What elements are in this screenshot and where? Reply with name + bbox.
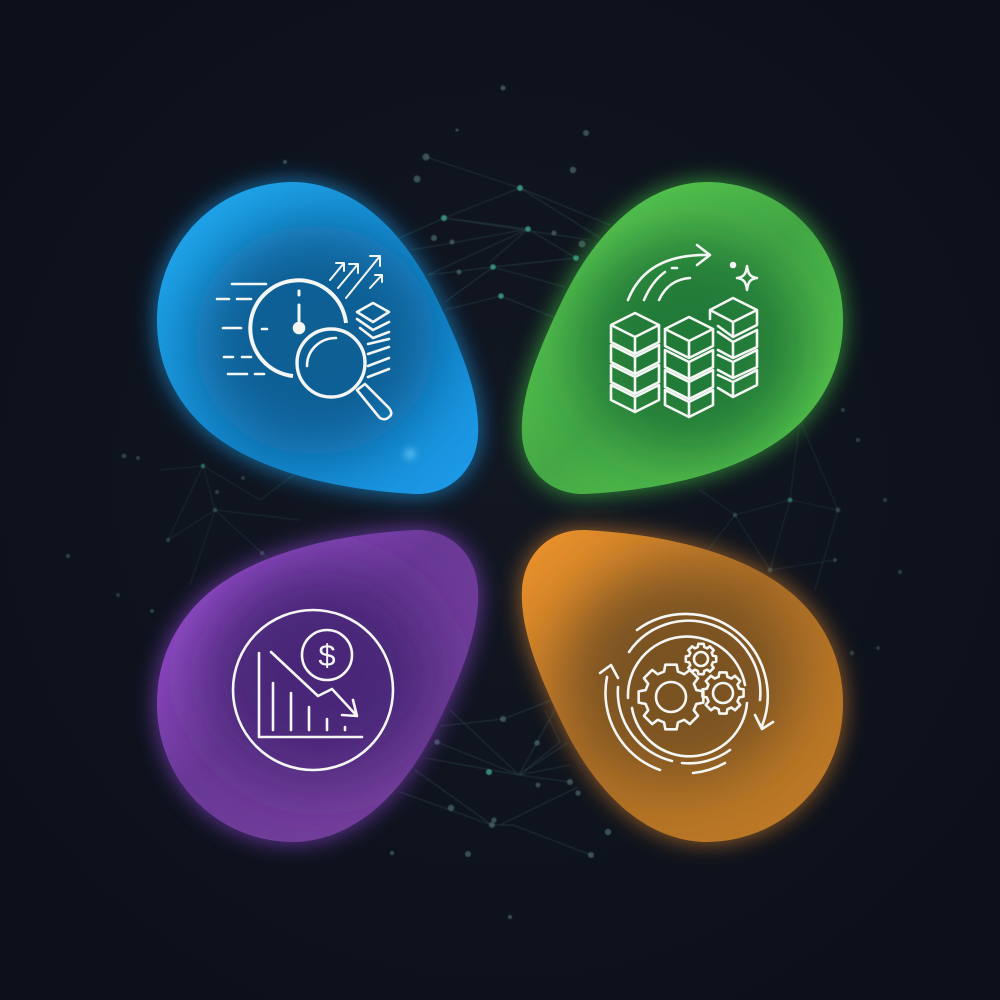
network: lower left: [66, 454, 300, 613]
panel: green petal: [522, 182, 843, 494]
icon: gears with circular arrows: [600, 614, 773, 773]
network: bottom centre: [390, 697, 611, 919]
icon: falling cost chart in circle: $: [318, 638, 336, 673]
panel: blue petal: [157, 182, 478, 494]
network: lower right: [700, 408, 902, 655]
icon: clock, magnifier, growth arrows and stacked layers: [217, 256, 391, 419]
icon: stacked cubes with curved arrow: [611, 245, 757, 417]
icon: falling cost chart in circle: [233, 610, 393, 770]
panel: orange petal: [522, 530, 843, 842]
network: top centre: [283, 86, 622, 320]
panel: purple petal: [157, 530, 478, 842]
